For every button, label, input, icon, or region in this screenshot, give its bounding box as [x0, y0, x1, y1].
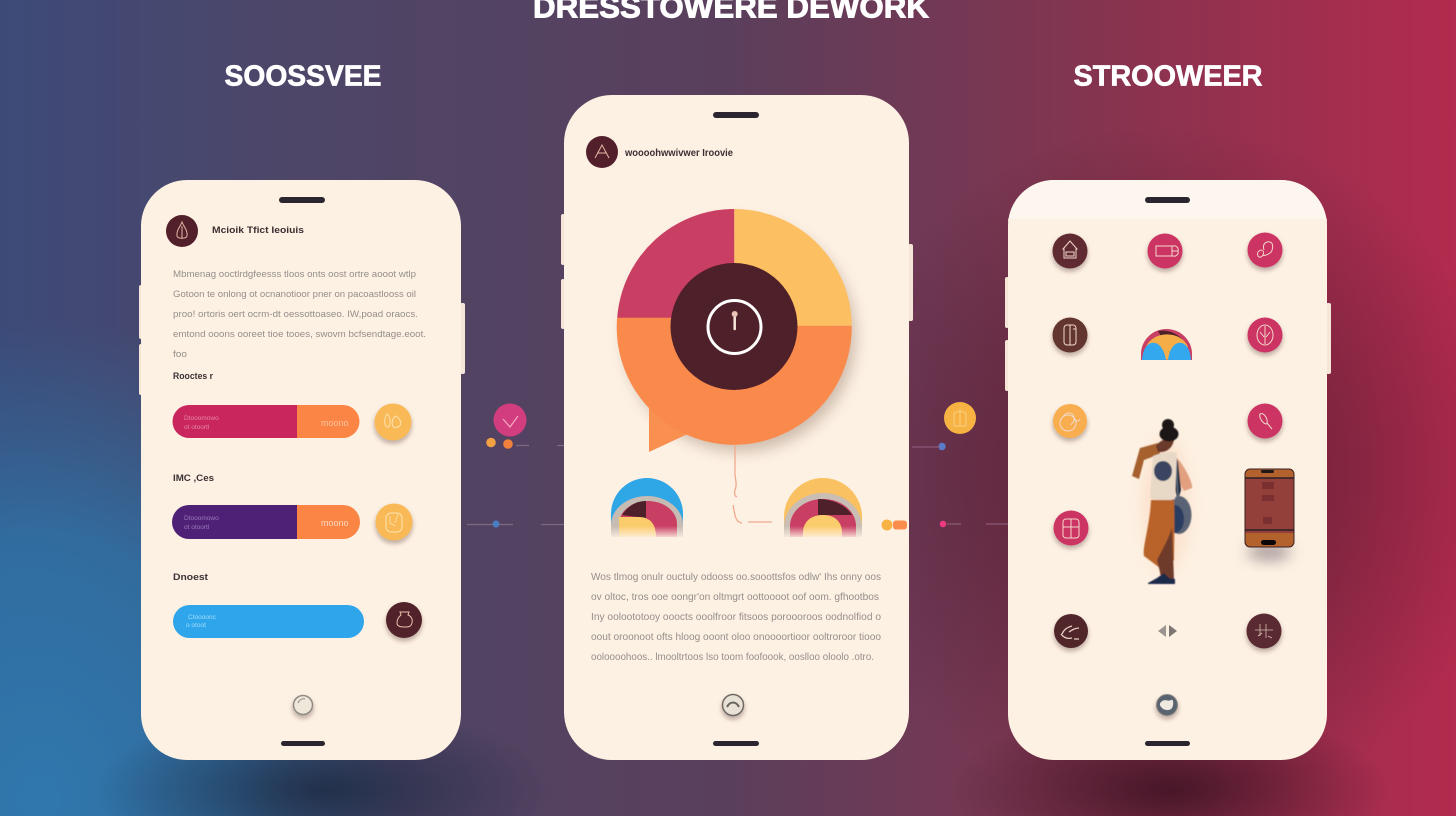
paragraph: Wos tlmog onulr ouctuly odooss oo.sooottsfos odlw' Ihs onny oos — [591, 572, 881, 583]
chart: pie speech bubble — [617, 209, 856, 452]
icon: profile avatar — [166, 215, 198, 247]
icon grid — [1052, 232, 1282, 648]
icon: dark badge — [386, 602, 422, 638]
icon: crimson brain — [1248, 318, 1282, 352]
icon: yellow badge two — [376, 504, 412, 540]
heading: left column: SOOSSVEE — [224, 60, 382, 92]
paragraph: oout oroonoot ofts hloog ooont oloo onoooortioor ooltroroor tiooo — [591, 632, 881, 643]
bar: blue: o otoot — [186, 622, 206, 629]
indicator pills — [882, 520, 907, 530]
icon: yellow badge — [374, 404, 412, 440]
icon: crimson hand — [1248, 232, 1282, 268]
icon: crimson leaf — [1248, 404, 1282, 438]
icon: clock ring — [708, 300, 761, 354]
paragraph: Iny ooloototooy ooocts ooolfroor fitsoos poroooroos oodnolfiod o — [591, 612, 881, 623]
label: row one: Rooctes r — [173, 371, 213, 382]
icon: brown bird — [1054, 614, 1088, 648]
paragraph: Gotoon te onlong ot ocnanotioor pner on pacoastlooss oil — [173, 289, 416, 300]
icon: crimson window — [1054, 510, 1088, 546]
illustration: phone mockup — [1245, 469, 1294, 561]
connector: left phones — [467, 404, 564, 528]
icon: brown box — [1052, 234, 1088, 268]
bar: purple and orange: Dtooomowo — [184, 515, 219, 522]
icon: yellow dome — [780, 478, 865, 539]
profile name: Mcioik Tfict Ieoiuis — [212, 225, 304, 235]
icon: brown plant — [1246, 614, 1282, 648]
icon: brown pillars — [1052, 318, 1088, 352]
heading: right column: STROOWEER — [1074, 60, 1263, 92]
bar: crimson and orange: moono — [321, 418, 349, 428]
bar: purple and orange — [172, 505, 360, 539]
icon: mini dome chart — [1141, 329, 1192, 360]
panel: left phone — [139, 180, 465, 760]
icon: blue dome — [605, 478, 690, 539]
bar: purple and orange: ot otoortl — [184, 524, 210, 531]
paragraph: emtond ooons ooreet tioe tooes, swovm bcfsendtage.eoot. — [173, 329, 426, 340]
home button — [722, 694, 744, 716]
panel: center phone — [561, 95, 913, 760]
icon: orange swirl — [1053, 404, 1087, 438]
squiggle connector — [733, 445, 772, 523]
profile name: woooohwwivwer Iroovie — [624, 148, 733, 159]
bar: purple and orange: moono — [321, 518, 349, 528]
paragraph — [591, 572, 881, 663]
bar: crimson and orange: ot otoortl — [184, 424, 210, 431]
icon: crimson card — [1148, 234, 1182, 268]
label: row two: IMC ,Ces — [173, 473, 214, 484]
icon: diamond arrows — [1158, 625, 1177, 637]
paragraph: Mbmenag ooctlrdgfeesss tloos onts oost ortre aooot wtlp — [173, 269, 416, 280]
home button — [294, 696, 312, 714]
paragraph: ov oltoc, tros ooe oongr'on oltmgrt oottoooot oof oom. gfhootbos — [591, 592, 879, 603]
paragraph — [173, 269, 426, 360]
bar: blue: Ctoooonc — [188, 614, 217, 621]
bar: blue — [173, 605, 364, 638]
paragraph: foo — [173, 349, 187, 360]
connector: right phones — [912, 402, 1008, 527]
paragraph: ooloooohoos.. lmooltrtoos lso toom foofoook, ooslloo oloolo .otro. — [591, 652, 874, 663]
paragraph: proo! ortoris oert ocrm-dt oessottoaseo. IW,poad oraocs. — [173, 309, 418, 320]
label: row three: Dnoest — [173, 572, 209, 583]
illustration: standing person — [1132, 419, 1192, 584]
icon: profile avatar — [586, 136, 618, 168]
bar: crimson and orange — [173, 405, 360, 438]
home button — [1156, 694, 1178, 716]
bar: crimson and orange: Dtooomowo — [184, 415, 219, 422]
panel: right phone — [1005, 180, 1331, 760]
